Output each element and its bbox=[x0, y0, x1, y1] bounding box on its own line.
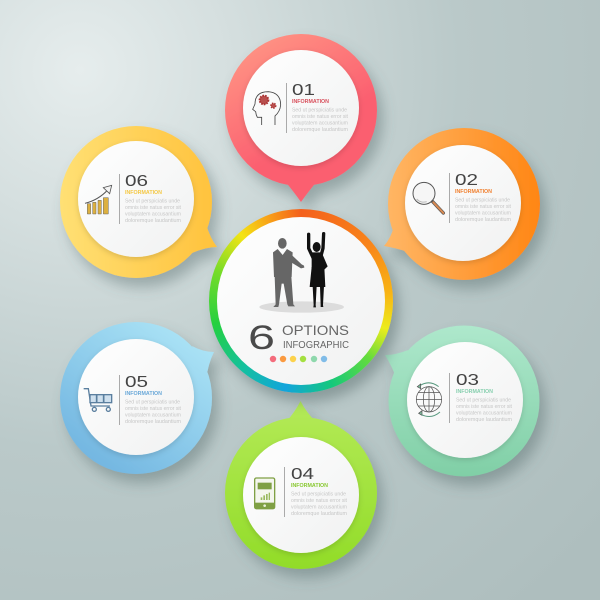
divider and text block 05 bbox=[119, 374, 182, 425]
divider and text block 01: 01 bbox=[292, 82, 315, 99]
heading: options: OPTIONS bbox=[282, 322, 349, 338]
icon: head with gears bbox=[253, 92, 281, 125]
divider and text block 05: doloremque laudantium bbox=[125, 419, 181, 425]
white disc bbox=[243, 437, 359, 553]
divider and text block 03: 03 bbox=[456, 372, 479, 389]
center rainbow ring bbox=[209, 209, 393, 393]
divider and text block 02: Sed ut perspiciatis unde bbox=[455, 198, 510, 204]
panel: option 06 bbox=[60, 126, 217, 278]
divider and text block 03: Sed ut perspiciatis unde bbox=[456, 398, 511, 404]
divider and text block 04 bbox=[284, 466, 348, 517]
businesswoman bbox=[309, 234, 328, 307]
white disc bbox=[407, 342, 523, 458]
divider and text block 02: doloremque laudantium bbox=[455, 217, 511, 223]
divider and text block 06: INFORMATION bbox=[125, 190, 162, 196]
yellow ring with pointer bbox=[60, 126, 217, 278]
divider and text block 01: doloremque laudantium bbox=[292, 127, 348, 133]
divider and text block 03: voluptatem accusantium bbox=[456, 410, 512, 416]
divider and text block 06 bbox=[119, 173, 182, 224]
white disc bbox=[243, 50, 359, 166]
icon: rising bar chart bbox=[85, 185, 112, 214]
white disc bbox=[78, 141, 194, 257]
blue ring with pointer bbox=[60, 322, 214, 474]
divider and text block 06: doloremque laudantium bbox=[125, 218, 181, 224]
icon: shopping cart bbox=[84, 389, 112, 411]
color dots bbox=[270, 356, 327, 362]
divider and text block 04: INFORMATION bbox=[291, 483, 328, 489]
divider and text block 04: Sed ut perspiciatis unde bbox=[291, 492, 346, 498]
panel: option 03 bbox=[385, 326, 540, 476]
divider and text block 01: omnis iste natus error sit bbox=[292, 114, 349, 120]
divider and text block 03: INFORMATION bbox=[456, 389, 493, 395]
divider and text block 06: omnis iste natus error sit bbox=[125, 205, 182, 211]
divider and text block 04: 04 bbox=[291, 466, 314, 483]
center title group bbox=[248, 234, 349, 362]
white disc bbox=[405, 145, 521, 261]
icon: tablet with chart bbox=[255, 478, 275, 509]
divider and text block 02: 02 bbox=[455, 172, 478, 189]
orange ring with pointer bbox=[384, 128, 540, 280]
divider and text block 01 bbox=[286, 82, 349, 133]
subheading: infographic: INFOGRAPHIC bbox=[283, 340, 349, 351]
panel: option 02 bbox=[384, 128, 540, 280]
divider and text block 05: 05 bbox=[125, 374, 148, 391]
divider and text block 04: voluptatem accusantium bbox=[291, 504, 347, 510]
divider and text block 02: INFORMATION bbox=[455, 189, 492, 195]
divider and text block 04: doloremque laudantium bbox=[291, 511, 347, 517]
divider and text block 05: Sed ut perspiciatis unde bbox=[125, 400, 180, 406]
divider and text block 04: omnis iste natus error sit bbox=[291, 498, 348, 504]
illustration: business people bbox=[259, 234, 344, 313]
divider and text block 02: voluptatem accusantium bbox=[455, 210, 511, 216]
divider and text block 05: omnis iste natus error sit bbox=[125, 406, 182, 412]
panel: option 04 bbox=[225, 401, 377, 569]
divider and text block 06: voluptatem accusantium bbox=[125, 212, 181, 218]
businessman bbox=[273, 238, 304, 307]
red ring with pointer bbox=[225, 34, 377, 202]
white disc bbox=[78, 339, 194, 455]
green ring with pointer bbox=[385, 326, 540, 476]
panel: option 05 bbox=[60, 322, 214, 474]
divider and text block 01: voluptatem accusantium bbox=[292, 120, 348, 126]
icon: magnifier bbox=[413, 182, 443, 213]
lime ring with pointer bbox=[225, 401, 377, 569]
divider and text block 01: INFORMATION bbox=[292, 99, 329, 105]
divider and text block 03: omnis iste natus error sit bbox=[456, 404, 513, 410]
numeral 6: 6 bbox=[248, 319, 275, 357]
divider and text block 02 bbox=[449, 172, 512, 223]
divider and text block 02: omnis iste natus error sit bbox=[455, 204, 512, 210]
divider and text block 01: Sed ut perspiciatis unde bbox=[292, 108, 347, 114]
icon: globe with arrows bbox=[416, 383, 442, 416]
divider and text block 06: Sed ut perspiciatis unde bbox=[125, 198, 180, 204]
floor shadow bbox=[259, 301, 344, 313]
panel: option 01 bbox=[225, 34, 377, 202]
divider and text block 06: 06 bbox=[125, 173, 148, 190]
divider and text block 03 bbox=[449, 372, 513, 423]
divider and text block 03: doloremque laudantium bbox=[456, 417, 512, 423]
divider and text block 05: voluptatem accusantium bbox=[125, 412, 181, 418]
divider and text block 05: INFORMATION bbox=[125, 391, 162, 397]
